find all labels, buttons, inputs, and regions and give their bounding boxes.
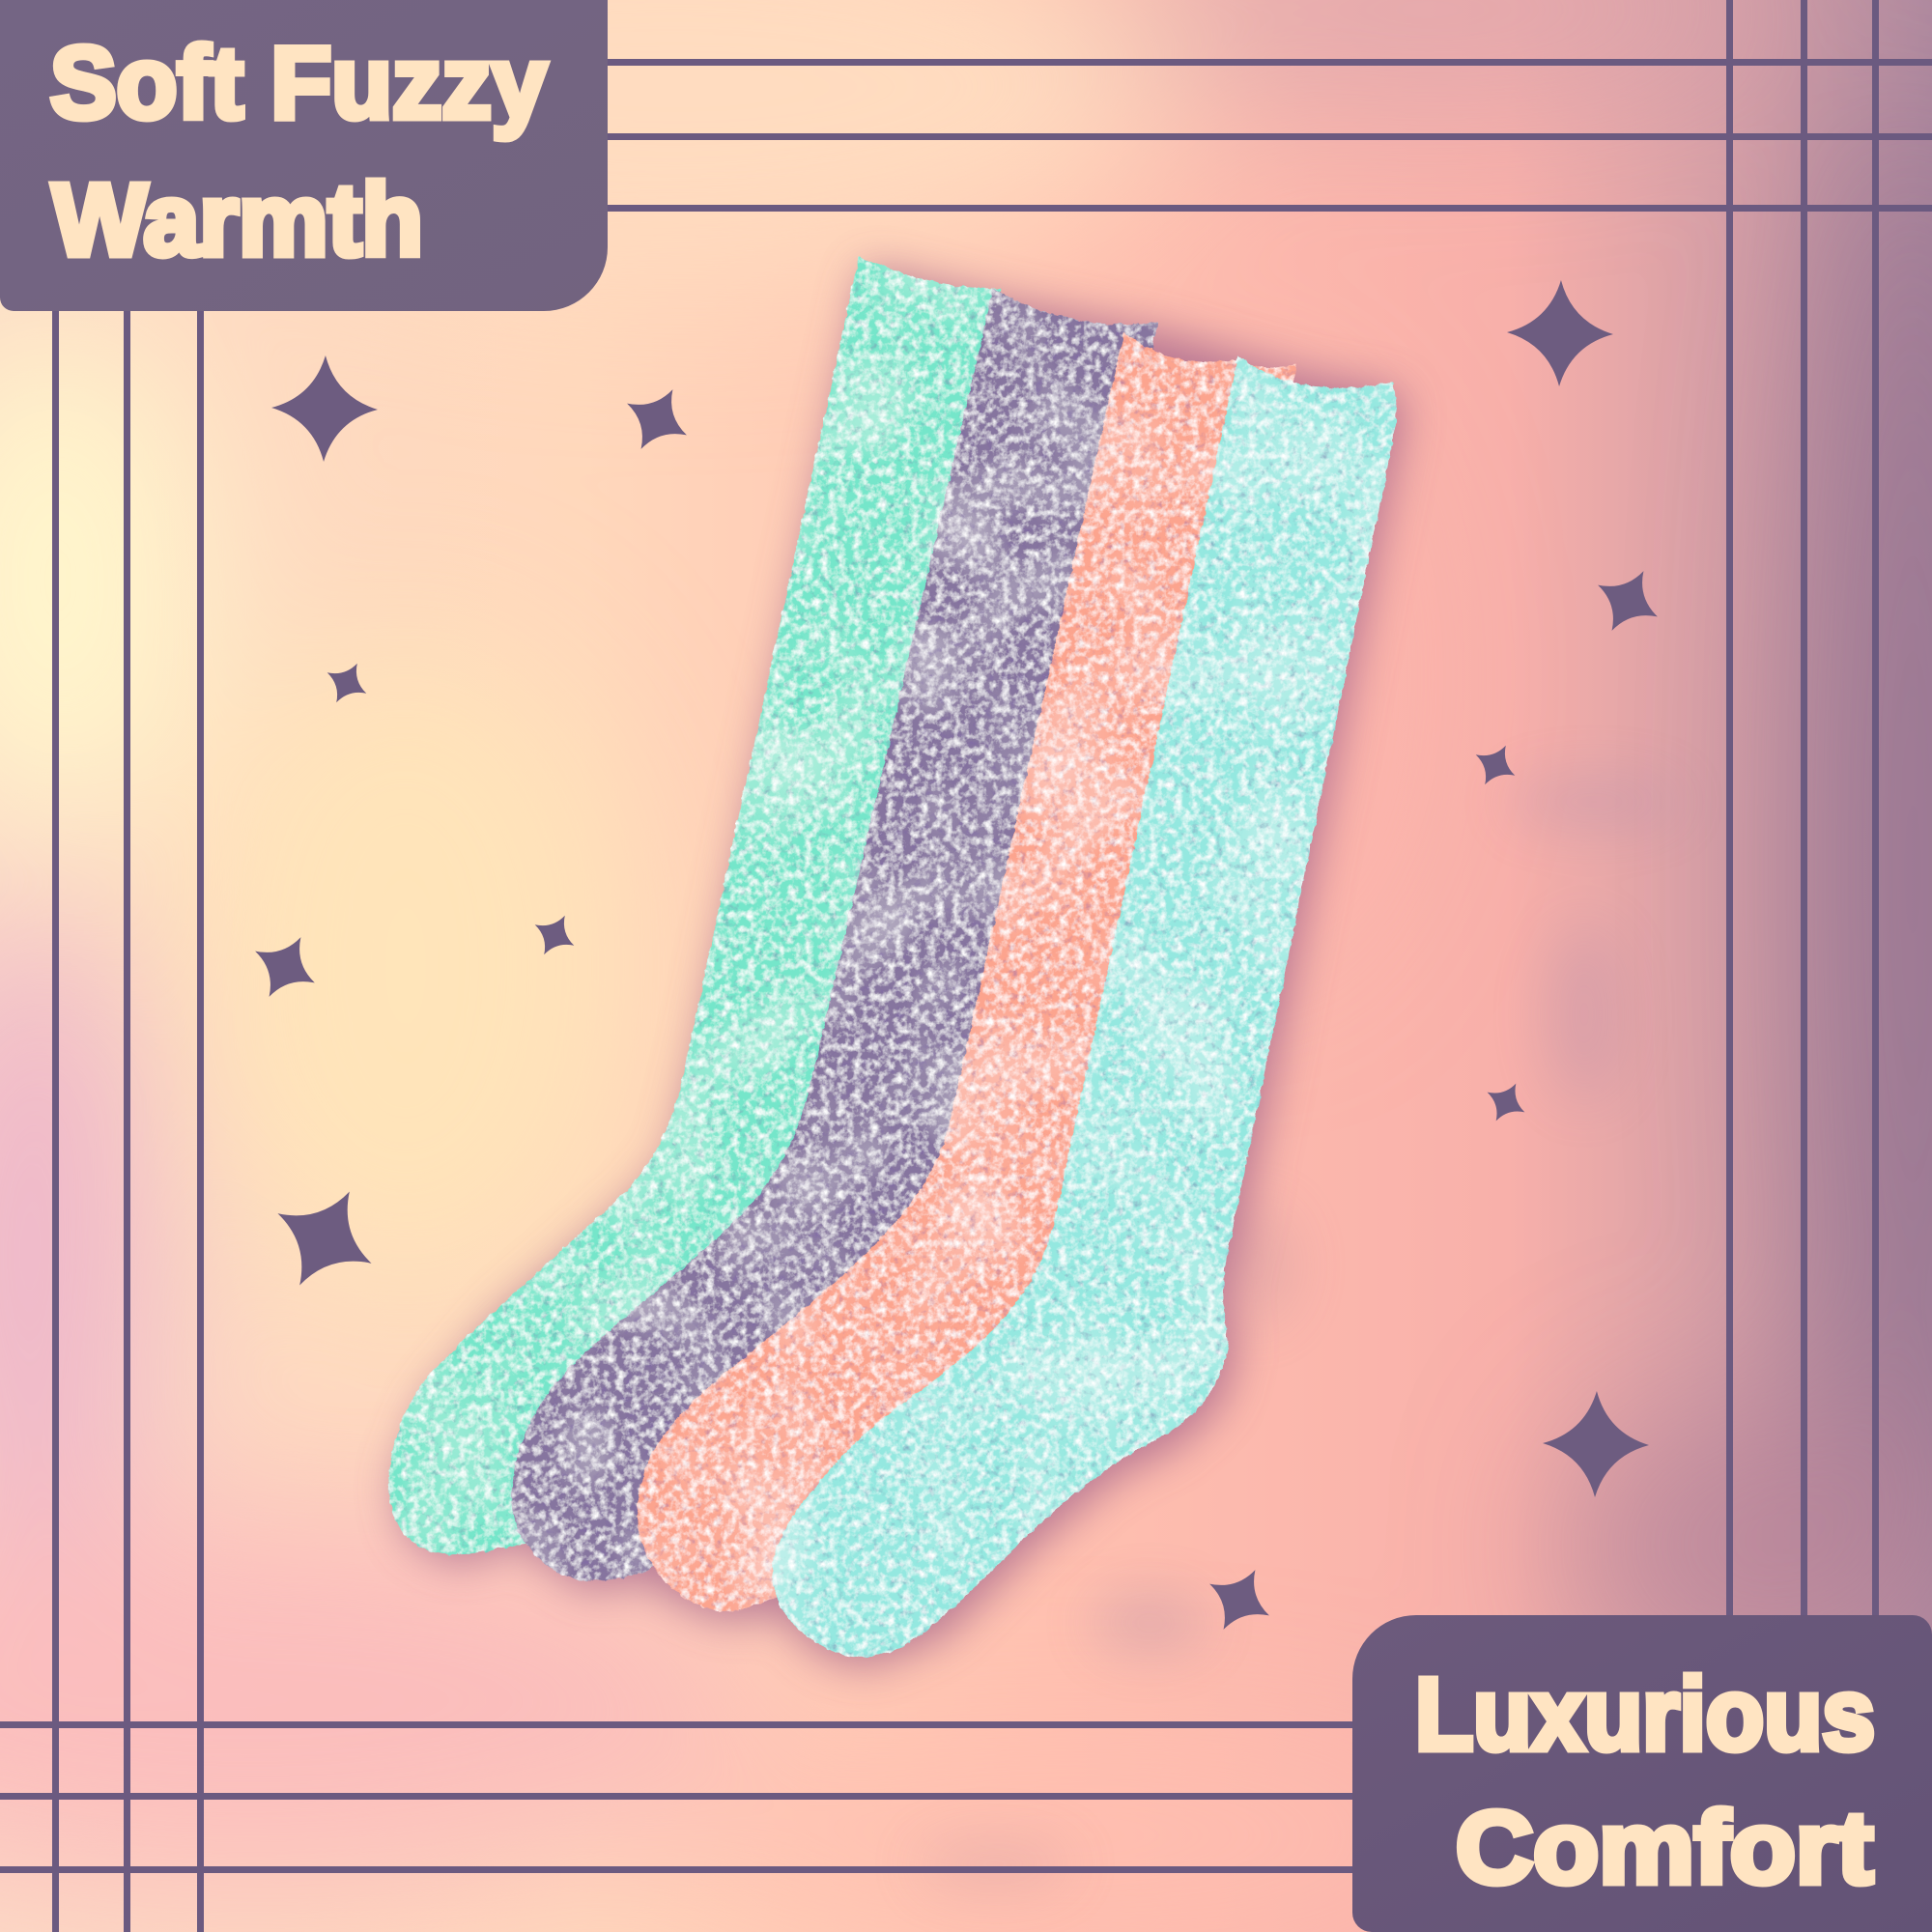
star 7	[1506, 279, 1614, 387]
panel: top-left heading	[0, 0, 608, 311]
star 2	[611, 374, 702, 465]
frame lines: bottom horizontal	[0, 1721, 1362, 1873]
star 12	[1194, 1554, 1285, 1645]
heading line: Comfort: Comfort	[1456, 1791, 1873, 1905]
star 6	[253, 1167, 396, 1310]
stars scattered around socks	[240, 279, 1673, 1645]
star 5	[240, 922, 330, 1012]
heading line: Soft Fuzzy: Soft Fuzzy	[50, 26, 547, 140]
star 1	[270, 355, 379, 463]
star 11	[1542, 1390, 1650, 1498]
sock: coral	[637, 332, 1296, 1611]
heading line: Luxurious: Luxurious	[1415, 1658, 1875, 1772]
frame lines: right vertical	[1726, 0, 1879, 1623]
star 3	[317, 653, 377, 713]
frame lines: top horizontal	[0, 59, 1932, 212]
frame lines: left vertical	[52, 0, 204, 1932]
star 4	[525, 905, 584, 965]
panel: bottom-right heading	[1352, 1615, 1932, 1932]
star 8	[1582, 555, 1673, 646]
star 9	[1465, 735, 1525, 795]
heading line: Warmth: Warmth	[52, 163, 423, 277]
star 10	[1477, 1073, 1535, 1131]
sock: mint	[389, 256, 1001, 1555]
sock: purple	[512, 288, 1158, 1580]
sock: aqua	[773, 355, 1397, 1657]
socks group	[389, 256, 1404, 1667]
sock shadow	[395, 267, 1404, 1667]
